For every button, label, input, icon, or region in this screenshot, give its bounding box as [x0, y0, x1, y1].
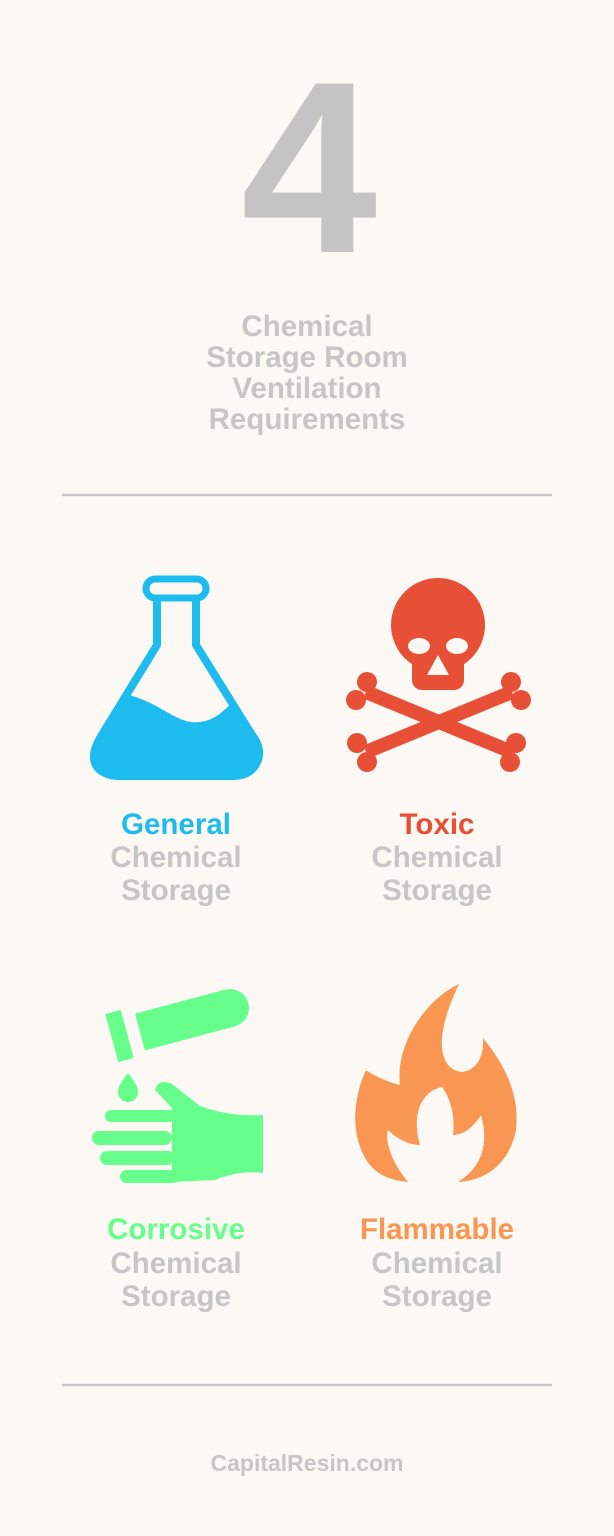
- label: general: Storage: [121, 874, 231, 907]
- label: toxic: Toxic: [400, 808, 474, 841]
- label: toxic: [371, 808, 503, 907]
- label: general: Chemical: [110, 841, 242, 874]
- icon: flask: [90, 576, 264, 780]
- label: general: [110, 808, 242, 907]
- title: Storage Room: [206, 341, 408, 374]
- icon: skull and crossbones: [346, 578, 531, 772]
- label: toxic: Chemical: [371, 841, 503, 874]
- title: Ventilation: [232, 372, 382, 405]
- label: corrosive: Corrosive: [107, 1213, 245, 1246]
- big number 4: 4: [241, 30, 377, 304]
- title: Chemical: [241, 310, 373, 343]
- title: [206, 310, 408, 436]
- label: flammable: Flammable: [360, 1213, 514, 1246]
- label: general: General: [121, 808, 231, 841]
- label: flammable: Chemical: [371, 1247, 503, 1280]
- title: Requirements: [209, 403, 405, 436]
- label: corrosive: Chemical: [110, 1247, 242, 1280]
- label: corrosive: [107, 1213, 245, 1313]
- label: flammable: [360, 1213, 514, 1313]
- icon: flame: [355, 984, 517, 1182]
- footer: CapitalResin.com: [210, 1450, 404, 1476]
- label: corrosive: Storage: [121, 1280, 231, 1313]
- label: toxic: Storage: [382, 874, 492, 907]
- label: flammable: Storage: [382, 1280, 492, 1313]
- icon: corrosive hand: [92, 989, 263, 1183]
